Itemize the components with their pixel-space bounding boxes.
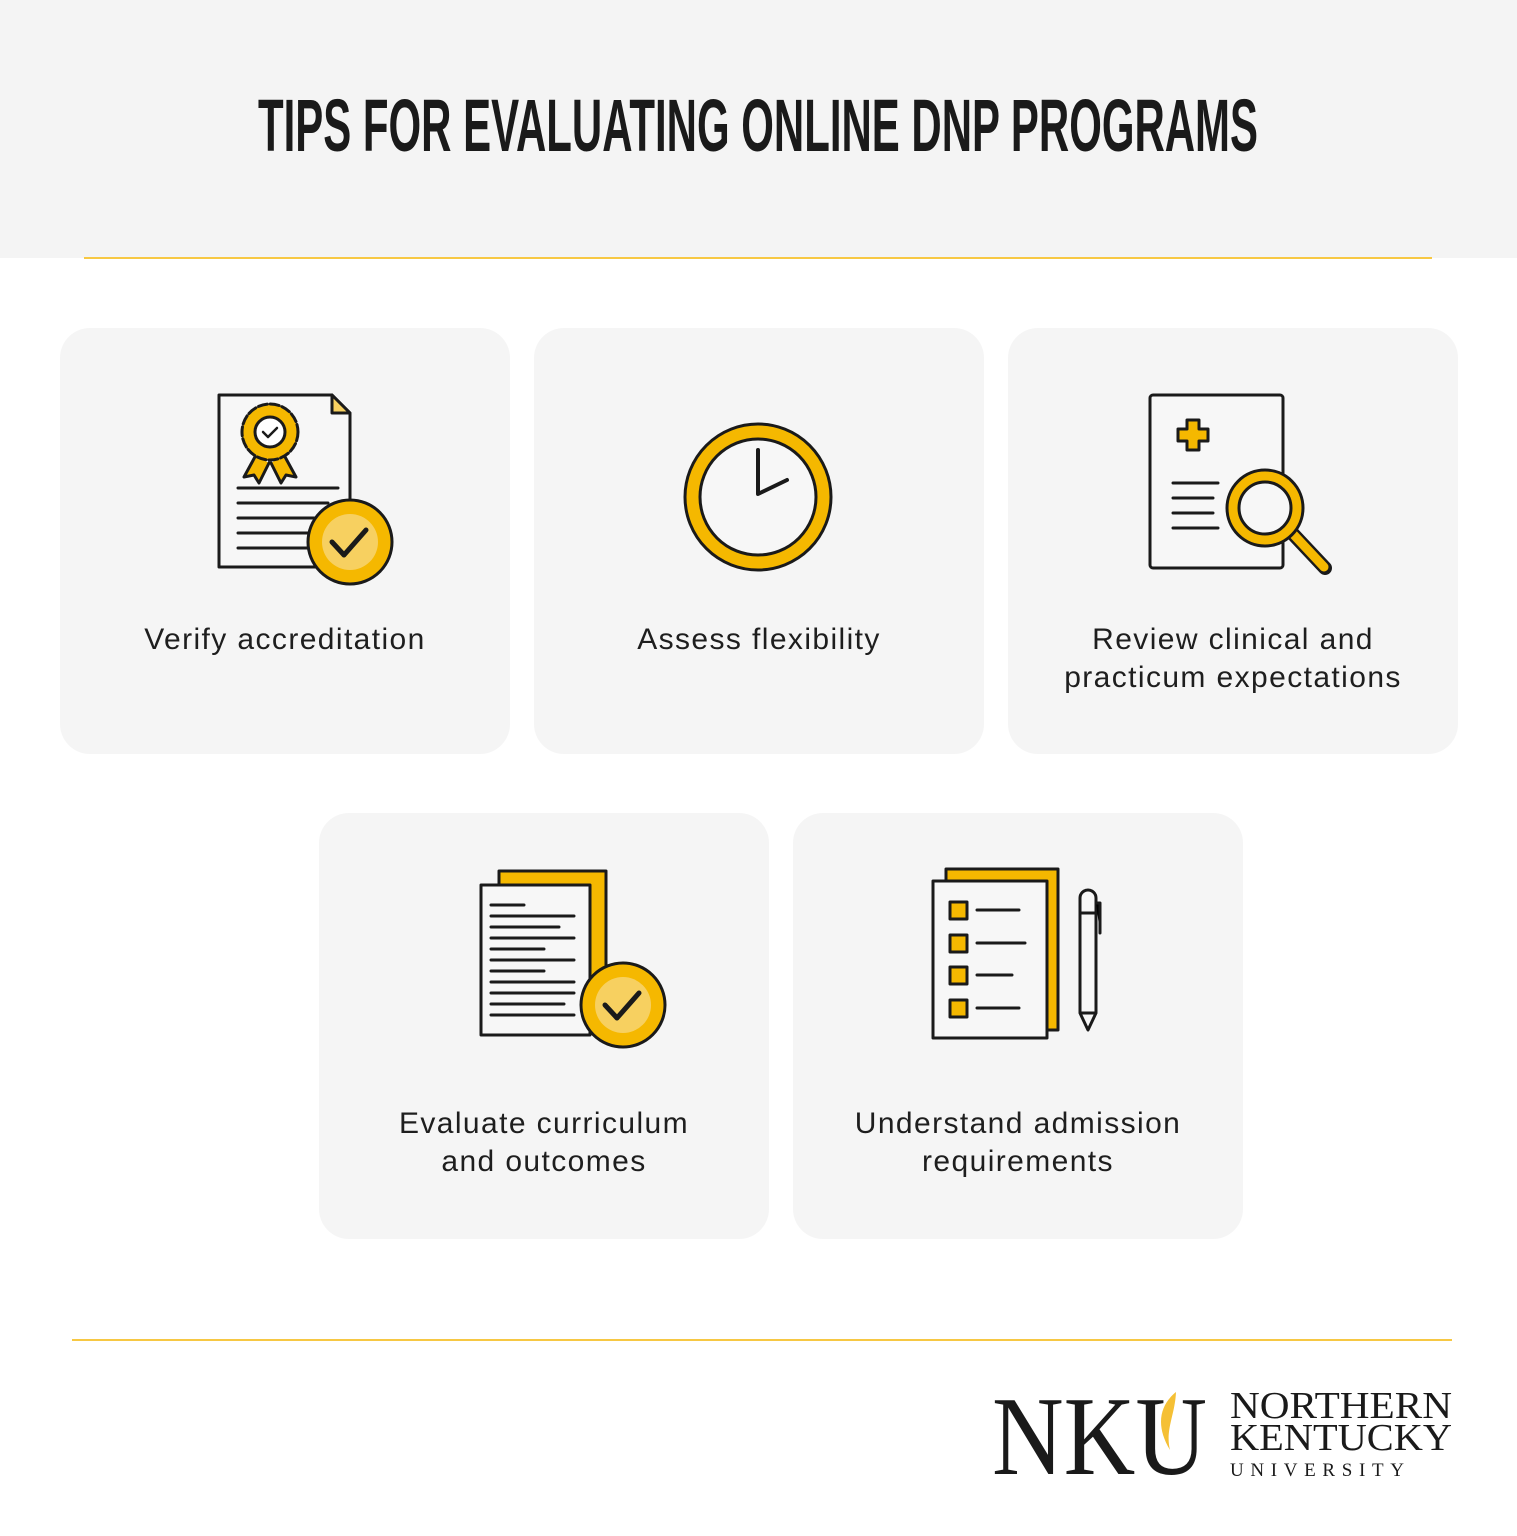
card: review clinical bbox=[1008, 328, 1458, 754]
card: assess flexibility bbox=[534, 328, 984, 754]
logo: NKU: UNIVERSITY bbox=[1230, 1460, 1404, 1481]
card: evaluate curriculum bbox=[319, 813, 769, 1239]
card: admission requirements: requirements bbox=[922, 1145, 1114, 1178]
icon: documents with check bbox=[480, 870, 666, 1048]
card: admission requirements: Understand admission bbox=[855, 1107, 1181, 1140]
card: verify accreditation bbox=[60, 328, 510, 754]
logo: NKU: NORTHERN bbox=[1230, 1385, 1452, 1427]
logo: NKU bbox=[992, 1375, 1452, 1490]
card: verify accreditation: Verify accreditation bbox=[144, 623, 426, 656]
icon: document with magnifier bbox=[1148, 394, 1332, 575]
card: evaluate curriculum: Evaluate curriculum bbox=[399, 1107, 689, 1140]
icon: clock bbox=[684, 422, 832, 572]
header band bbox=[0, 0, 1517, 258]
icon: checklist with pen bbox=[932, 868, 1102, 1040]
card: assess flexibility: Assess flexibility bbox=[637, 623, 881, 656]
card: admission requirements bbox=[793, 813, 1243, 1239]
logo: NKU: KENTUCKY bbox=[1230, 1417, 1452, 1459]
card: review clinical: Review clinical and bbox=[1092, 623, 1374, 656]
card: evaluate curriculum: and outcomes bbox=[441, 1145, 647, 1178]
icon: certificate with check bbox=[218, 393, 394, 586]
card: review clinical: practicum expectations bbox=[1064, 661, 1402, 694]
